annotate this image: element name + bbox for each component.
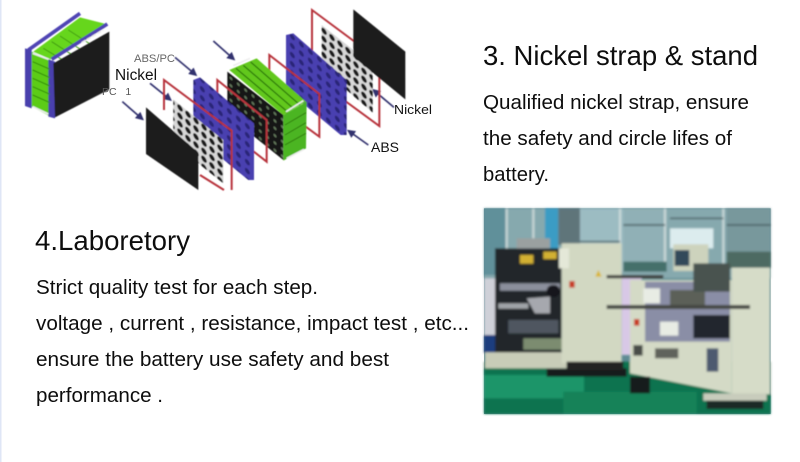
blue ABS/PC holder left [193,77,254,180]
text block: laboratory description: performance . [36,385,163,407]
left edge strip [0,0,2,462]
text block: nickel strap description [483,92,749,186]
text block: laboratory description: ensure the battery use safety and best [36,349,389,371]
diagram label: ABS: ABS [371,140,399,155]
green floor [484,362,771,414]
red frame centre [269,55,319,137]
text block: laboratory description: Strict quality test for each step. [36,277,318,299]
red frame centre-left [217,80,267,162]
text block: nickel strap description: Qualified nickel strap, ensure [483,92,749,114]
heading: nickel strap and stand: 3. Nickel strap & stand [483,40,758,71]
black PC cover front [146,107,198,190]
text block: laboratory description [36,277,469,407]
battery cell block [229,58,306,115]
nickel strap left [173,99,223,183]
nickel strap far right [322,25,373,113]
red nickel frame far right [312,10,379,126]
exploded battery pack diagram [25,9,405,190]
right machine body [630,280,732,393]
shadow under machines [547,368,627,377]
arrow labels [122,41,394,145]
assembled battery pack [25,13,109,118]
text block: laboratory description: voltage , current , resistance, impact test , etc... [36,313,469,335]
diagram label: Nickel right: Nickel [394,102,432,117]
diagram label: Nickel: Nickel [115,67,157,84]
black PC cover far right [353,9,405,99]
heading: laboratory: 4.Laboretory [35,225,190,256]
diagram label: ABS/PC: ABS/PC [134,53,175,65]
photo: battery production machines [484,208,771,414]
diagram label: PC 1: PC 1 [102,86,131,98]
blue bin [484,335,506,353]
factory window background [484,208,771,355]
left machine mechanism [485,238,567,368]
left machine cabinet [562,243,622,363]
blue ABS holder right [286,33,347,135]
text block: nickel strap description: the safety and circle lifes of [483,128,732,150]
text block: nickel strap description: battery. [483,164,549,186]
red frame front [164,80,232,190]
